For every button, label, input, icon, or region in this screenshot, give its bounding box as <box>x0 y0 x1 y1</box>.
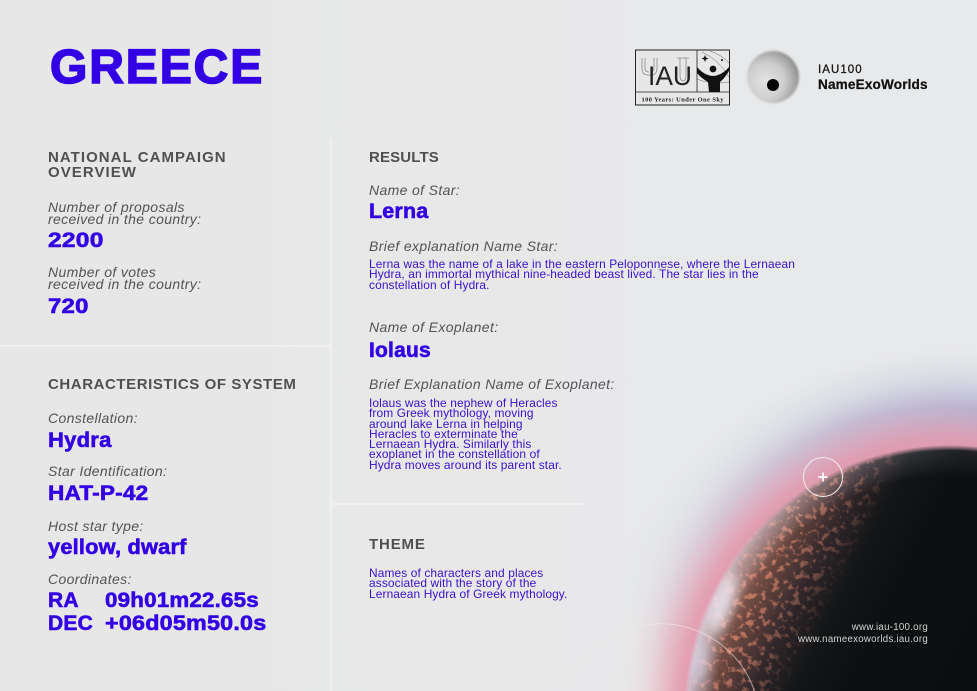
RA label: RA <box>48 589 79 612</box>
theme text: associated with the story of the <box>369 576 536 590</box>
star explanation: Hydra, an immortal mythical nine-headed beast lived. The star lies in the <box>369 267 759 281</box>
votes label: Number of votes <box>48 264 156 280</box>
coordinates value <box>48 589 266 635</box>
heading: RESULTS <box>369 149 439 166</box>
logo: IAU 100 years: IAU <box>648 61 692 91</box>
exoplanet explanation <box>369 396 562 472</box>
star explanation: Lerna was the name of a lake in the eastern Peloponnese, where the Lernaean <box>369 257 795 271</box>
logo text: IAU100 <box>818 64 863 76</box>
heading: THEME <box>369 536 426 553</box>
exoplanet explanation: Lernaean Hydra. Similarly this <box>369 437 531 451</box>
horizontal divider left <box>0 345 330 347</box>
proposals label: Number of proposals <box>48 199 185 215</box>
theme text <box>369 566 567 601</box>
exoplanet explanation: Iolaus was the nephew of Heracles <box>369 396 558 410</box>
panel: characteristics of system <box>48 376 296 635</box>
logo text: NameExoWorlds <box>818 77 928 92</box>
coordinates label: Coordinates: <box>48 571 132 587</box>
star name: Lerna <box>369 200 428 223</box>
constellation value: Hydra <box>48 429 112 452</box>
marker: plus in circle <box>803 457 843 497</box>
star explanation label: Brief explanation Name Star: <box>369 238 558 254</box>
website links <box>798 622 928 645</box>
website links: www.nameexoworlds.iau.org <box>798 634 928 645</box>
star explanation <box>369 257 795 292</box>
logo: IAU 100 years <box>635 50 730 106</box>
exoplanet name: Iolaus <box>369 339 431 362</box>
proposals value: 2200 <box>48 229 104 252</box>
title: GREECE <box>50 41 264 94</box>
background planet artwork <box>640 367 977 691</box>
star name label: Name of Star: <box>369 182 460 198</box>
exoplanet explanation: exoplanet in the constellation of <box>369 447 540 461</box>
exoplanet explanation: Hydra moves around its parent star. <box>369 458 562 472</box>
theme text: Names of characters and places <box>369 566 543 580</box>
exoplanet explanation: around lake Lerna in helping <box>369 417 523 431</box>
horizontal divider right <box>332 503 586 505</box>
RA number: 09h01m22.65s <box>105 589 259 612</box>
constellation label: Constellation: <box>48 410 138 426</box>
host star type label: Host star type: <box>48 518 144 534</box>
decorative arc outline <box>653 624 755 691</box>
heading: CHARACTERISTICS OF SYSTEM <box>48 376 296 393</box>
panel: theme <box>369 536 567 601</box>
panel: national campaign overview <box>48 149 227 318</box>
exoplanet explanation: from Greek mythology, moving <box>369 406 534 420</box>
logo: IAU 100 years: 100 Years: Under One Sky <box>642 96 724 104</box>
star explanation: constellation of Hydra. <box>369 278 490 292</box>
exoplanet name label: Name of Exoplanet: <box>369 319 498 335</box>
vertical divider <box>330 138 332 691</box>
proposals label <box>48 199 201 227</box>
logo text <box>818 64 928 92</box>
star identification value: HAT-P-42 <box>48 482 148 505</box>
DEC number: +06d05m50.0s <box>105 612 266 635</box>
votes value: 720 <box>48 295 89 318</box>
DEC label: DEC <box>48 612 93 635</box>
votes label <box>48 264 201 292</box>
heading <box>48 149 227 181</box>
website links: www.iau-100.org <box>852 622 928 633</box>
star identification label: Star Identification: <box>48 463 167 479</box>
panel: results <box>369 149 795 472</box>
theme text: Lernaean Hydra of Greek mythology. <box>369 587 567 601</box>
logo: NameExoWorlds sphere <box>746 50 800 104</box>
host star type value: yellow, dwarf <box>48 536 187 559</box>
exoplanet explanation: Heracles to exterminate the <box>369 427 518 441</box>
heading: OVERVIEW <box>48 164 137 181</box>
exoplanet explanation label: Brief Explanation Name of Exoplanet: <box>369 376 615 392</box>
heading: NATIONAL CAMPAIGN <box>48 149 227 166</box>
proposals label: received in the country: <box>48 211 201 227</box>
votes label: received in the country: <box>48 276 201 292</box>
